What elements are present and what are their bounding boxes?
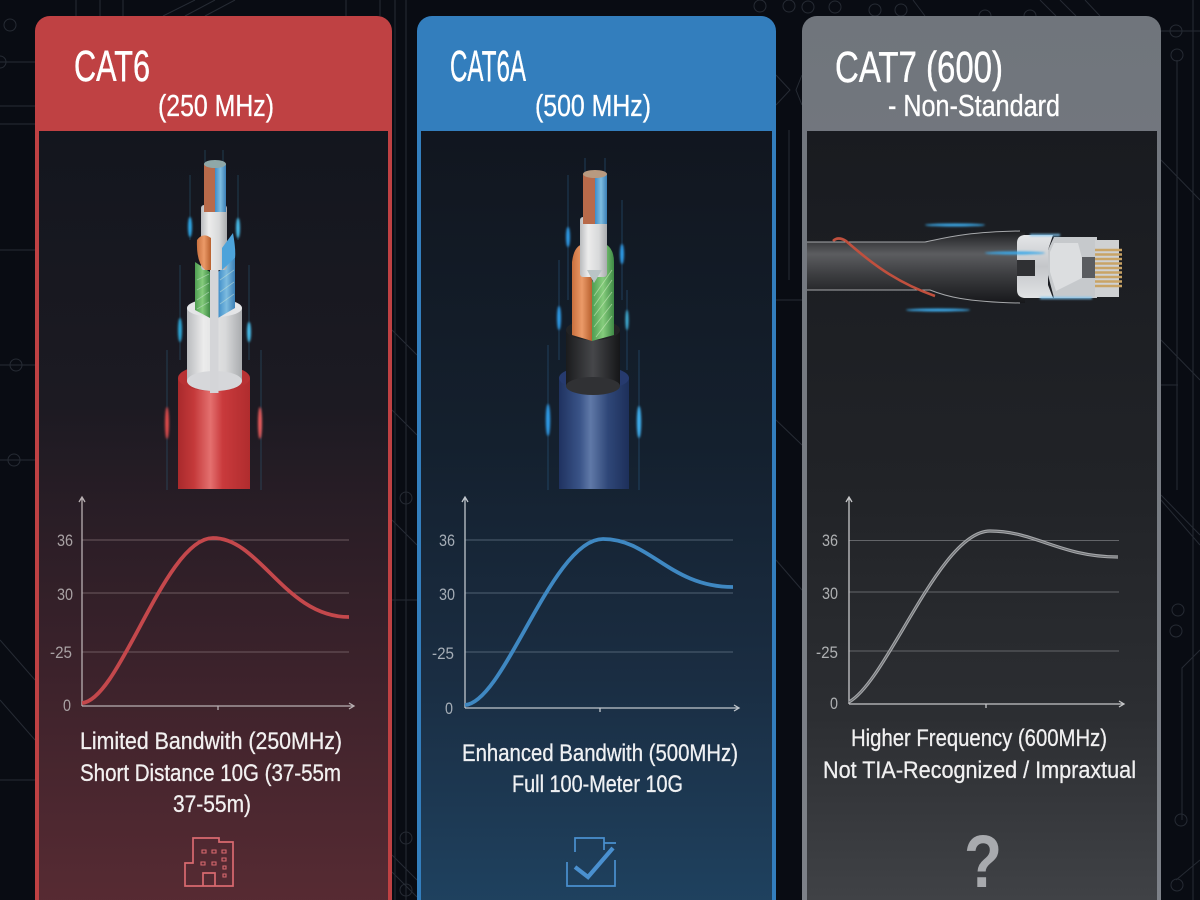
- text block: CAT7 description: [823, 725, 1136, 784]
- text block: CAT6 description: Limited Bandwith (250MHz): [80, 728, 342, 755]
- chart: CAT7 bandwidth curve: -25: [816, 643, 838, 662]
- chart: CAT7 bandwidth curve: [816, 497, 1124, 713]
- header: CAT6 red band: [35, 16, 392, 900]
- chart: CAT6A bandwidth curve: 30: [439, 585, 455, 604]
- subheading: Non-Standard: - Non-Standard: [888, 88, 1060, 123]
- subheading: 500 MHz: (500 MHz): [535, 88, 651, 123]
- chart: CAT7 bandwidth curve: 36: [822, 531, 838, 550]
- chart: CAT6 bandwidth curve: 30: [57, 585, 73, 604]
- inner dark panel: CAT6: [39, 131, 388, 900]
- text block: CAT6 description: Short Distance 10G (37-55m: [80, 760, 341, 787]
- subheading: 250 MHz: (250 MHz): [158, 88, 274, 123]
- chart: CAT6A bandwidth curve: [432, 497, 739, 718]
- header: CAT7 grey band: [802, 16, 1161, 900]
- illustration: CAT6 cable cutaway: [165, 150, 262, 490]
- panel: CAT7: [802, 16, 1161, 900]
- chart: CAT6 bandwidth curve: 0: [63, 696, 71, 715]
- text block: CAT6A description: Enhanced Bandwith (500MHz): [462, 740, 738, 767]
- chart: CAT6 bandwidth curve: [50, 497, 354, 715]
- heading: CAT7 (600): CAT7 (600): [835, 43, 1003, 92]
- chart: CAT6A bandwidth curve: 0: [445, 699, 453, 718]
- text block: CAT7 description: Higher Frequency (600MHz): [851, 725, 1107, 752]
- text block: CAT6A description: Full 100-Meter 10G: [512, 771, 683, 798]
- chart: CAT6 bandwidth curve: 36: [57, 531, 73, 550]
- chart: CAT6A bandwidth curve: -25: [432, 644, 454, 663]
- chart: CAT7 bandwidth curve: 0: [830, 694, 838, 713]
- chart: CAT6 bandwidth curve: -25: [50, 643, 72, 662]
- text block: CAT7 description: Not TIA-Recognized / Impraxtual: [823, 757, 1136, 784]
- icon: building: [185, 838, 233, 886]
- inner dark panel: CAT7: [807, 131, 1157, 900]
- header: CAT6A blue band: [417, 16, 776, 900]
- heading: CAT6A: CAT6A: [450, 42, 526, 91]
- text block: CAT6 description: 37-55m): [173, 791, 251, 818]
- text block: CAT6 description: [80, 728, 342, 818]
- illustration: RJ45 plug on cable: [807, 224, 1122, 312]
- inner dark panel: CAT6A: [421, 131, 772, 900]
- chart: CAT7 bandwidth curve: 30: [822, 584, 838, 603]
- text block: CAT6A description: [462, 740, 738, 798]
- icon: checkbox: [567, 838, 616, 886]
- heading: CAT6: CAT6: [74, 42, 150, 91]
- panel: CAT6: [35, 16, 392, 900]
- chart: CAT6A bandwidth curve: 36: [439, 531, 455, 550]
- illustration: CAT6A cable cutaway: [546, 158, 641, 490]
- panel: CAT6A: [417, 16, 776, 900]
